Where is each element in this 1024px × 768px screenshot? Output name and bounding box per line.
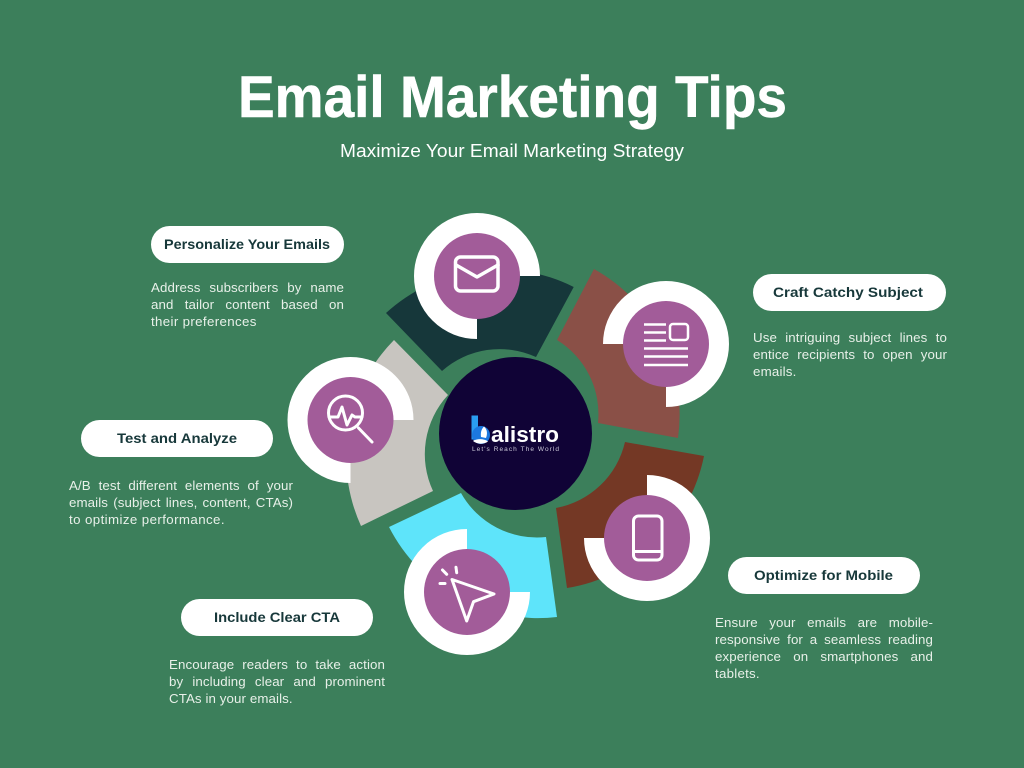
node: subject line <box>614 292 718 396</box>
description: by including clear and prominent <box>169 674 385 689</box>
panel: craft catchy subject <box>753 274 947 379</box>
node: call to action <box>415 540 520 644</box>
ring segment: cyan <box>389 493 557 618</box>
description: entice recipients to open your <box>753 347 947 362</box>
heading pill: Include Clear CTA <box>214 609 340 625</box>
description: emails (subject lines, content, CTAs) <box>69 495 293 510</box>
logo tagline: Let's Reach The World <box>472 446 559 453</box>
icon: magnifier with pulse <box>328 396 372 442</box>
heading pill: Craft Catchy Subject <box>773 284 923 300</box>
logo wordmark: alistro <box>491 422 559 447</box>
ring segment: rust <box>556 442 704 588</box>
heading pill <box>181 599 373 636</box>
description <box>753 330 947 379</box>
description <box>715 615 933 681</box>
description: Use intriguing subject lines to <box>753 330 947 345</box>
description: tablets. <box>715 666 760 681</box>
icon: phone <box>634 516 662 560</box>
description: their preferences <box>151 314 257 329</box>
icon: cursor click <box>440 567 494 621</box>
node: analytics <box>298 368 403 472</box>
description: Address subscribers by name <box>151 280 344 295</box>
description: Ensure your emails are mobile- <box>715 615 933 630</box>
description: Encourage readers to take action <box>169 657 385 672</box>
panel: optimize for mobile <box>715 557 933 681</box>
node: email envelope <box>424 224 530 328</box>
description: to optimize performance. <box>69 512 225 527</box>
heading pill: Optimize for Mobile <box>754 567 893 583</box>
icon: envelope <box>456 257 498 291</box>
logo: b mark with rocket <box>472 416 490 444</box>
heading pill <box>151 226 344 263</box>
description: CTAs in your emails. <box>169 691 293 706</box>
panel: personalize your emails <box>151 226 344 329</box>
heading pill: Test and Analyze <box>117 430 237 446</box>
description <box>69 478 293 527</box>
description <box>151 280 344 329</box>
node: mobile <box>594 486 700 590</box>
center logo circle <box>439 357 592 510</box>
description <box>169 657 385 706</box>
panel: include clear cta <box>169 599 385 706</box>
heading pill <box>81 420 273 457</box>
ring segment: dark teal <box>386 269 574 371</box>
ring segment: muted brown <box>557 269 680 438</box>
icon: article <box>644 324 688 365</box>
description: responsive for a seamless reading <box>715 632 933 647</box>
description: A/B test different elements of your <box>69 478 293 493</box>
ring segment: light grey <box>346 340 448 526</box>
title: Email Marketing Tips <box>238 65 787 130</box>
description: emails. <box>753 364 797 379</box>
heading pill: Personalize Your Emails <box>164 236 330 252</box>
description: experience on smartphones and <box>715 649 933 664</box>
panel: test and analyze <box>69 420 293 527</box>
heading pill <box>753 274 946 311</box>
heading pill <box>728 557 920 594</box>
description: and tailor content based on <box>151 297 344 312</box>
subtitle: Maximize Your Email Marketing Strategy <box>340 141 684 161</box>
